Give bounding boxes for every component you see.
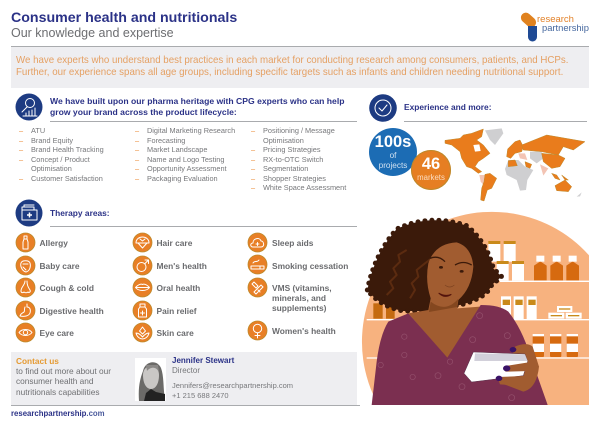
list column 2 xyxy=(135,126,235,182)
icon: check mark xyxy=(369,94,397,122)
list column 1: – xyxy=(19,145,23,154)
therapy: hair care xyxy=(132,232,192,252)
list column 3: – xyxy=(251,183,255,192)
intro panel xyxy=(11,46,589,88)
therapy: pain relief xyxy=(132,300,197,320)
therapy: pain relief: Pain relief xyxy=(156,306,197,316)
therapy: baby care: Baby care xyxy=(40,260,80,270)
list column 2: – xyxy=(135,136,139,144)
therapy: eye care: Eye care xyxy=(40,328,74,338)
therapy: men's health: Men's health xyxy=(156,260,207,270)
therapy: oral health xyxy=(132,278,200,298)
lifecycle heading: grow your brand across the product lifecycle: xyxy=(50,107,237,117)
list column 1: Brand Health Tracking xyxy=(31,145,104,154)
list column 3: White Space Assessment xyxy=(263,183,346,192)
list column 3: Segmentation xyxy=(263,164,308,173)
lifecycle heading xyxy=(50,96,344,117)
list column 3: Positioning / Message xyxy=(263,126,335,135)
therapy: smoking cessation: Smoking cessation xyxy=(272,260,348,270)
therapy: allergy xyxy=(16,232,68,252)
stat: 46 markets xyxy=(411,150,451,190)
shelf background xyxy=(362,212,589,405)
therapy: sleep aids xyxy=(248,232,314,252)
therapy: smoking cessation xyxy=(248,254,348,274)
stat: 100s of projects: of xyxy=(390,151,396,160)
list column 3: Optimisation xyxy=(263,136,304,144)
stat: 46 markets: markets xyxy=(417,173,445,182)
list column 3: – xyxy=(251,126,255,135)
list column 2: Market Landscape xyxy=(147,145,207,154)
therapy: oral health: Oral health xyxy=(156,283,200,293)
therapy: digestive health: Digestive health xyxy=(40,306,104,316)
hand xyxy=(502,344,539,392)
list column 2: Forecasting xyxy=(147,136,185,144)
therapy: digestive health xyxy=(16,300,104,320)
list column 3: – xyxy=(251,174,255,182)
contact name and details: Jennifer Stewart xyxy=(172,356,234,365)
icon: research magnifier xyxy=(16,94,42,120)
list column 1 xyxy=(19,126,104,182)
list column 3: – xyxy=(251,164,255,173)
contact text: consumer health and xyxy=(16,376,94,386)
sweater xyxy=(372,305,548,405)
list column 2: Digital Marketing Research xyxy=(147,126,235,135)
therapy: vitamins, minerals and supplements: minerals, and xyxy=(272,293,326,303)
therapy: women's health: Women's health xyxy=(272,326,336,336)
therapy: allergy: Allergy xyxy=(40,238,68,248)
hair xyxy=(367,220,502,311)
list column 1: – xyxy=(19,154,23,164)
logo xyxy=(520,12,589,42)
stat: 100s of projects xyxy=(369,128,417,176)
list column 3: – xyxy=(251,154,255,164)
therapy: women's health xyxy=(248,320,336,340)
fingers and nails xyxy=(496,347,533,387)
therapy: vitamins, minerals and supplements: supplements) xyxy=(272,303,326,313)
list column 2: – xyxy=(135,164,139,173)
therapy: men's health xyxy=(132,256,207,276)
therapy: eye care xyxy=(16,322,74,342)
list column 1: Optimisation xyxy=(31,164,72,173)
contact panel xyxy=(11,352,357,405)
therapy: sleep aids: Sleep aids xyxy=(272,238,313,248)
face and neck xyxy=(408,242,480,358)
therapy heading: Therapy areas: xyxy=(50,208,110,218)
facial features xyxy=(429,257,472,312)
intro text xyxy=(16,55,568,78)
subtitle: Our knowledge and expertise xyxy=(11,26,174,40)
intro text: We have experts who understand best practices in each market for conducting research among consumers, patients, and HCPs. xyxy=(16,55,568,66)
contact text: Contact us xyxy=(16,356,59,366)
list column 1: Brand Equity xyxy=(31,136,73,144)
footer website: researchpartnership.com xyxy=(11,409,105,418)
list column 3: Pricing Strategies xyxy=(263,145,321,154)
contact name and details: Jennifers@researchpartnership.com xyxy=(172,380,293,390)
title: Consumer health and nutritionals xyxy=(11,10,237,26)
list column 1: Customer Satisfaction xyxy=(31,174,103,182)
contact text xyxy=(16,356,111,397)
list column 1: – xyxy=(19,136,23,144)
list column 1: ATU xyxy=(31,126,45,135)
lifecycle heading: We have built upon our pharma heritage with CPG experts who can help xyxy=(50,96,344,106)
logo: partnership xyxy=(542,22,589,33)
therapy: vitamins, minerals and supplements xyxy=(248,278,332,313)
icon: medical folder xyxy=(16,200,42,226)
list column 2: Opportunity Assessment xyxy=(147,164,227,173)
list column 2: – xyxy=(135,145,139,154)
list column 1: – xyxy=(19,126,23,135)
therapy: cough and cold xyxy=(16,278,94,298)
contact name and details xyxy=(172,356,293,400)
list column 3: – xyxy=(251,145,255,154)
contact name and details: +1 215 688 2470 xyxy=(172,390,229,400)
list column 2: Packaging Evaluation xyxy=(147,174,218,182)
contact photo xyxy=(135,358,166,401)
contact text: to find out more about our xyxy=(16,366,111,376)
list column 3: Shopper Strategies xyxy=(263,174,326,182)
experience heading: Experience and more: xyxy=(404,102,492,112)
list column 1: Concept / Product xyxy=(31,154,90,164)
illustration: woman shopping at pharmacy shelves xyxy=(362,212,589,405)
sweater dots xyxy=(378,313,515,401)
therapy: baby care xyxy=(16,256,80,276)
list column 3 xyxy=(251,126,346,192)
list column 2: – xyxy=(135,154,139,164)
contact text: nutritionals capabilities xyxy=(16,387,99,397)
list column 2: Name and Logo Testing xyxy=(147,154,224,164)
list column 2: – xyxy=(135,174,139,182)
list column 3: RX-to-OTC Switch xyxy=(263,154,323,164)
logo: research xyxy=(537,14,574,25)
intro text: Further, our experience spans all age groups, including specific targets such as infants and children needing nutritional support. xyxy=(16,67,563,78)
list column 1: – xyxy=(19,174,23,182)
therapy: skin care: Skin care xyxy=(156,328,194,338)
box xyxy=(464,352,528,382)
therapy: hair care: Hair care xyxy=(156,238,192,248)
world map xyxy=(444,128,585,202)
stat: 100s of projects: projects xyxy=(379,160,407,170)
stat: 100s of projects: 100s xyxy=(375,133,411,151)
therapy: skin care xyxy=(132,322,194,342)
therapy: vitamins, minerals and supplements: VMS (vitamins, xyxy=(272,283,332,293)
stat: 46 markets: 46 xyxy=(422,155,440,173)
contact name and details: Director xyxy=(172,366,200,375)
therapy: cough and cold: Cough & cold xyxy=(40,283,94,293)
list column 2: – xyxy=(135,126,139,135)
